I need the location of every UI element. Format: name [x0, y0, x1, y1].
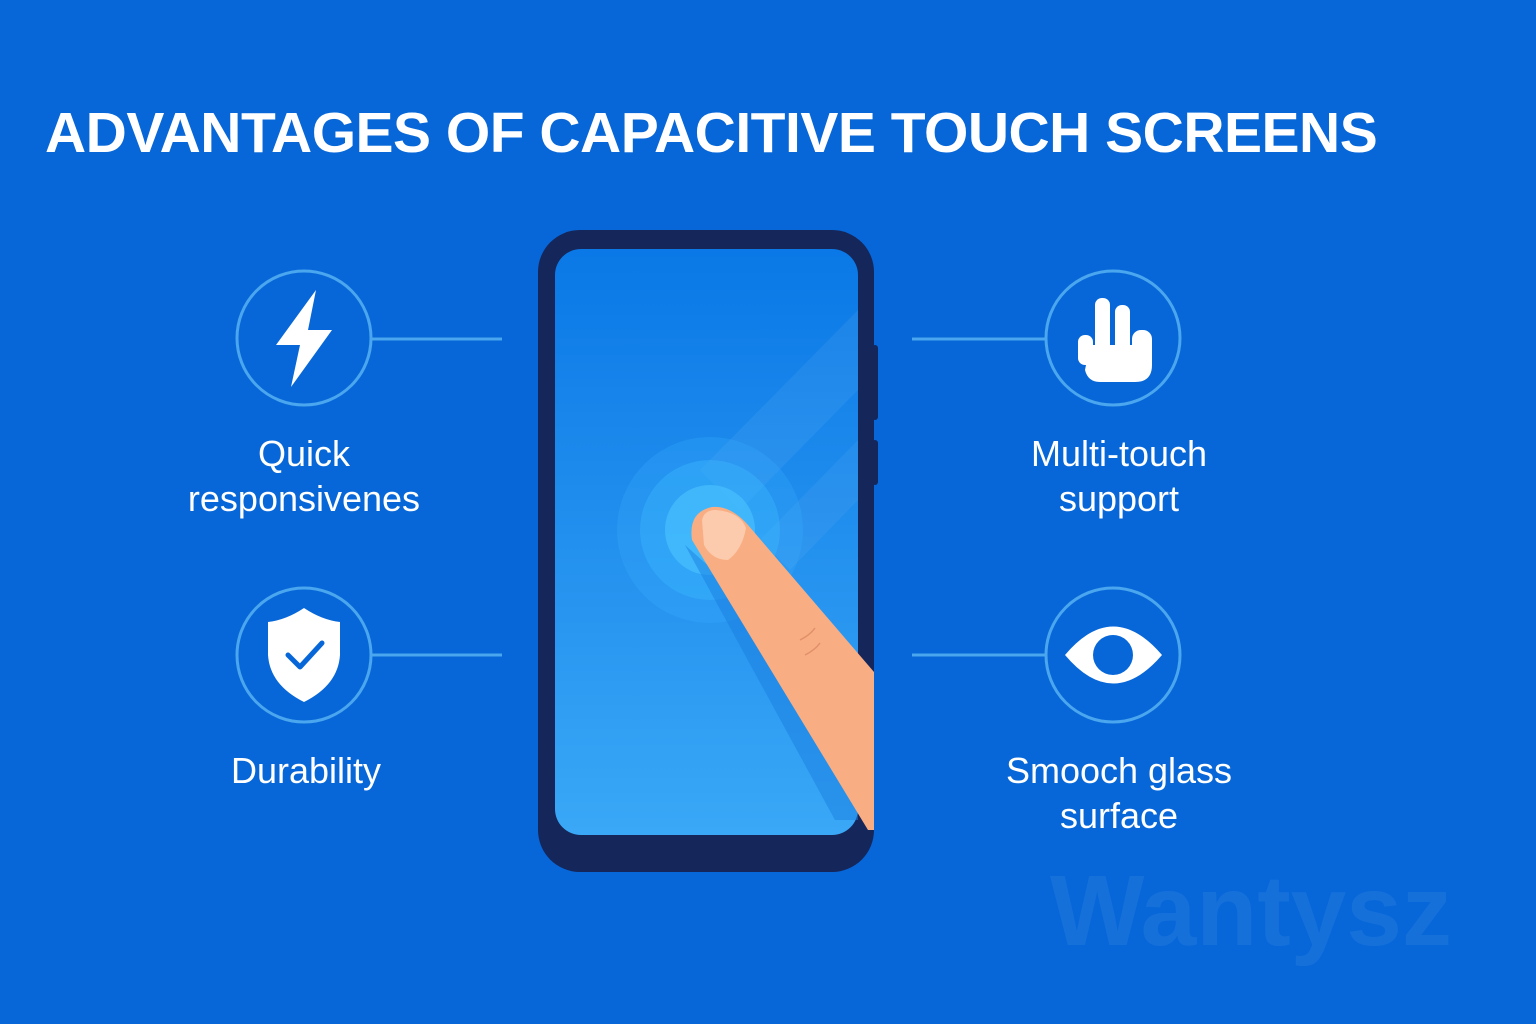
- label: smooth glass: [1006, 750, 1232, 836]
- ripple: [617, 437, 803, 623]
- label: quick responsiveness: responsivenes: [188, 478, 420, 519]
- icon: two fingers: [1078, 298, 1152, 382]
- icon: lightning: [276, 290, 332, 387]
- connector lines: [371, 339, 1046, 655]
- label: smooth glass: surface: [1060, 795, 1178, 836]
- label: multi-touch: Multi-touch: [1031, 433, 1207, 474]
- icon: eye: [1065, 626, 1162, 684]
- finger: [691, 507, 874, 830]
- label: durability: Durability: [231, 750, 381, 791]
- icon circles: [237, 271, 1180, 722]
- watermark: Wantysz: [1050, 855, 1452, 967]
- label: smooth glass: Smooch glass: [1006, 750, 1232, 791]
- finger shadow: [685, 545, 858, 820]
- title: ADVANTAGES OF CAPACITIVE TOUCH SCREENS: [45, 101, 1377, 165]
- label: multi-touch: [1031, 433, 1207, 519]
- icon: shield: [268, 608, 340, 702]
- label: quick responsiveness: Quick: [258, 433, 350, 474]
- label: multi-touch: support: [1059, 478, 1179, 519]
- phone: [538, 230, 878, 872]
- label: quick responsiveness: [188, 433, 420, 519]
